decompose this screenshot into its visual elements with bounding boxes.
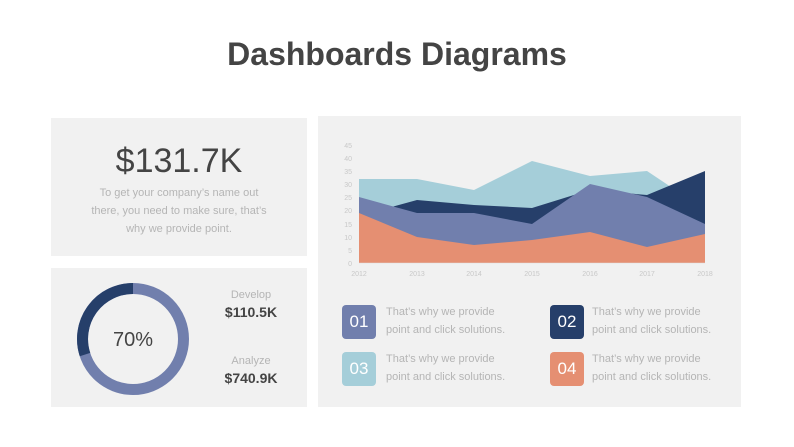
stat: analyze: $740.9K (225, 370, 277, 386)
stat: analyze: Analyze (231, 355, 271, 367)
area chart: 2017 (639, 271, 655, 278)
area chart: 0 (348, 261, 352, 268)
area chart: 40 (344, 156, 352, 163)
legend 04: That’s why we provide point and click solutions. (592, 353, 711, 383)
description: there, you need to make sure, that’s (91, 205, 267, 217)
legend 04: 04 (558, 359, 576, 378)
stat: develop: $110.5K (225, 304, 277, 320)
area chart: 45 (344, 143, 352, 150)
description: To get your company’s name out (100, 187, 258, 199)
legend 03: 03 (350, 359, 368, 378)
legend 02: 02 (558, 312, 576, 331)
area chart: 2018 (697, 271, 713, 278)
description (91, 187, 267, 235)
panel: chart (318, 116, 741, 407)
area chart: 2014 (466, 271, 482, 278)
area chart: 35 (344, 169, 352, 176)
area chart: 2016 (582, 271, 598, 278)
area chart: 15 (344, 222, 352, 229)
area chart: 2013 (409, 271, 425, 278)
panel: donut (51, 268, 307, 407)
donut chart (77, 283, 189, 395)
legend 04 (550, 352, 711, 386)
legend 01 (342, 305, 505, 339)
legend 01: 01 (350, 312, 368, 331)
stat: develop: Develop (231, 289, 271, 301)
stat: develop (225, 289, 277, 320)
area chart: 25 (344, 195, 352, 202)
donut chart: 70% (113, 329, 153, 351)
area chart: 20 (344, 208, 352, 215)
description: why we provide point. (126, 223, 232, 235)
big number: $131.7K (116, 142, 242, 180)
legend 01: That’s why we provide point and click solutions. (386, 306, 505, 336)
area chart: 30 (344, 182, 352, 189)
legend 02 (550, 305, 711, 339)
area chart: 5 (348, 248, 352, 255)
area chart: 2012 (351, 271, 367, 278)
legend 03: That’s why we provide point and click solutions. (386, 353, 505, 383)
panel: revenue (51, 118, 307, 256)
area chart: 10 (344, 235, 352, 242)
legend 03 (342, 352, 505, 386)
legend 02: That’s why we provide point and click solutions. (592, 306, 711, 336)
stat: analyze (224, 355, 278, 386)
title: Dashboards Diagrams (227, 36, 567, 72)
area chart: 2015 (524, 271, 540, 278)
